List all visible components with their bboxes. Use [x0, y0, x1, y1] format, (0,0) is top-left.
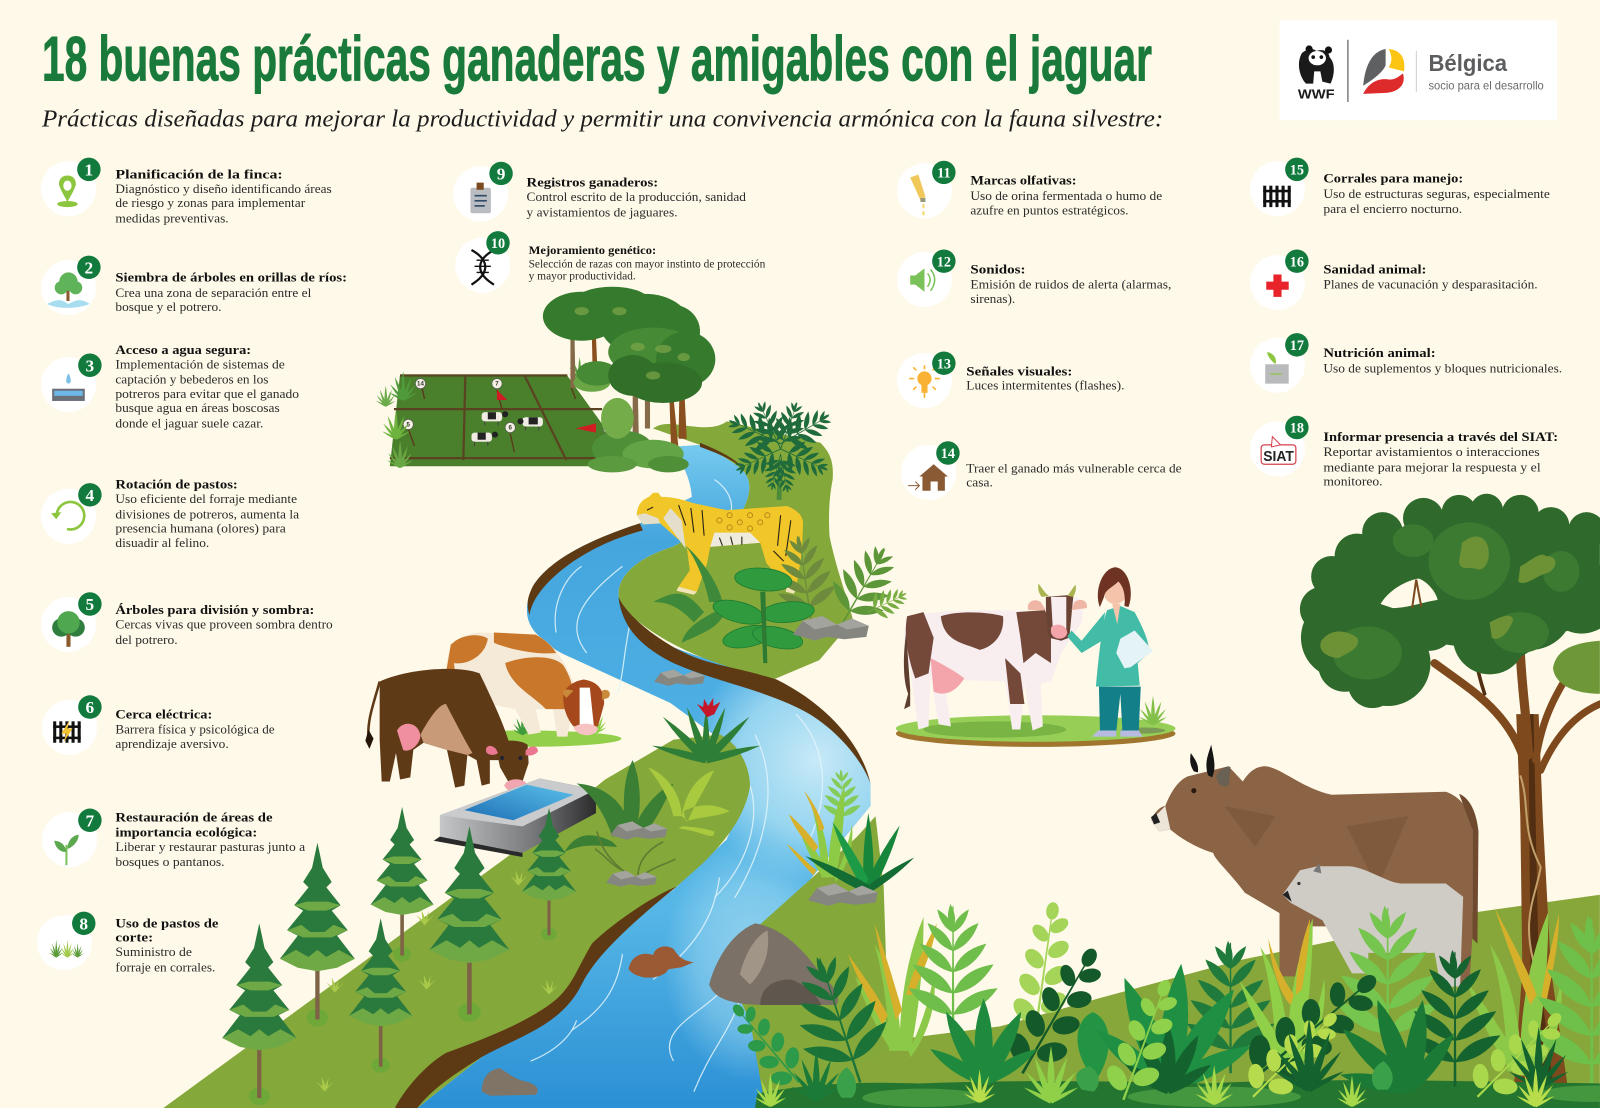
canopy highlights: [1320, 536, 1555, 658]
practice 9: Registros ganaderos:: [527, 176, 658, 190]
icon 8: grass: 8: [79, 914, 88, 933]
practice 3: busque agua en áreas boscosas: [115, 401, 280, 415]
bromeliad: [651, 698, 761, 764]
icon 6: electric fence: [42, 695, 102, 755]
big tree: [1300, 494, 1600, 1084]
practice 3: Implementación de sistemas de: [115, 357, 285, 371]
cow: [904, 584, 1087, 731]
zebu calf: [1283, 863, 1463, 987]
icon 13: light bulb: [897, 351, 956, 408]
dairy cow and vet: [896, 567, 1175, 747]
hill: lower right: [755, 895, 1600, 1108]
icon 2: tree by river: [41, 256, 101, 315]
orange and white cow: [430, 633, 621, 747]
icon 18: SIAT: [1250, 416, 1309, 476]
practice 13: Luces intermitentes (flashes).: [966, 379, 1124, 393]
practice 9: y avistamientos de jaguares.: [527, 205, 678, 219]
water trough: [434, 778, 596, 857]
practice 10: Selección de razas con mayor instinto de protección: [529, 258, 766, 270]
practice 2: bosque y el potrero.: [115, 300, 222, 314]
grass tuft: [1139, 696, 1167, 725]
practice 11: Marcas olfativas:: [970, 174, 1076, 188]
practice 7: [42, 809, 306, 869]
practice 1: medidas preventivas.: [115, 211, 229, 225]
river rock: [654, 669, 705, 686]
trunk: [1435, 653, 1600, 1084]
Bélgica text: Bélgica: [1428, 50, 1508, 76]
practice 18: mediante para mejorar la respuesta y el: [1323, 460, 1541, 474]
icon 15: corral fence: 15: [1290, 162, 1304, 178]
icon 1: location pin: 1: [85, 160, 93, 179]
practice 18: monitoreo.: [1323, 475, 1383, 489]
icon 14: house: [901, 441, 960, 500]
practice 7: Liberar y restaurar pasturas junto a: [115, 840, 306, 854]
forest canopy: [543, 287, 715, 403]
icon 3: water trough: 3: [86, 356, 95, 375]
icon 16: red cross: [1250, 249, 1309, 310]
river plant group: [787, 769, 916, 906]
practice 2: [41, 256, 347, 315]
practice 5: Árboles para división y sombra:: [115, 603, 314, 617]
icon 7: sprout: 7: [86, 811, 95, 830]
icon 13: light bulb: 13: [937, 356, 951, 372]
practice 1: Diagnóstico y diseño identificando áreas: [115, 182, 332, 196]
practice 4: Uso eficiente del forraje mediante: [115, 492, 297, 506]
practice 3: [41, 343, 299, 430]
practice 3: captación y bebederos en los: [115, 373, 269, 387]
practice 8: forraje en corrales.: [115, 960, 215, 974]
rocks: [610, 821, 667, 840]
practice 3: potreros para evitar que el ganado: [115, 387, 299, 401]
practice 14: [901, 441, 1182, 500]
practice 9: [453, 162, 747, 221]
icon 9: records clipboard: 9: [497, 165, 506, 184]
brown rock: [629, 946, 694, 978]
icon 8: grass: [37, 912, 96, 970]
practice 14: Traer el ganado más vulnerable cerca de: [966, 461, 1182, 475]
mid plants: [564, 698, 761, 887]
practice 7: Restauración de áreas de: [115, 810, 273, 824]
practice 15: Corrales para manejo:: [1323, 172, 1463, 186]
practice 16: [1250, 249, 1538, 310]
practice 3: Acceso a agua segura:: [115, 343, 251, 357]
practice 4: presencia humana (olores) para: [115, 522, 286, 536]
field flags: [497, 390, 596, 433]
rocks: [793, 616, 869, 641]
practice 6: Barrera física y psicológica de: [115, 723, 275, 737]
practice 1: de riesgo y zonas para implementar: [115, 196, 306, 210]
practice 4: divisiones de potreros, aumenta la: [115, 507, 299, 521]
practice 2: Siembra de árboles en orillas de ríos:: [115, 271, 347, 285]
practice 8: Uso de pastos de: [115, 916, 219, 930]
river bank upper left: [528, 523, 643, 615]
practice 10: y mayor productividad.: [529, 271, 636, 283]
practice 11: Uso de orina fermentada o humo de: [970, 189, 1163, 203]
icon 18: SIAT: 18: [1290, 421, 1304, 437]
river rocks: [482, 923, 838, 1096]
practice 4: Rotación de pastos:: [115, 478, 238, 492]
practice 8: [37, 912, 219, 974]
field cows: [471, 411, 543, 446]
practice 7: importancia ecológica:: [115, 826, 257, 840]
icon 5: shade tree: [41, 592, 102, 652]
practice 14: casa.: [966, 476, 993, 490]
practice 10: [455, 231, 766, 293]
icon 10: DNA: 10: [491, 236, 505, 252]
dark grass leaves: [653, 546, 725, 643]
practice 15: [1250, 158, 1550, 216]
practice 5: Cercas vivas que proveen sombra dentro: [115, 617, 333, 631]
practice 15: para el encierro nocturno.: [1323, 202, 1462, 216]
big boulder: [709, 923, 838, 1005]
thin plant: [595, 832, 676, 877]
practice 17: [1250, 333, 1562, 393]
branches: [1435, 653, 1600, 770]
practice 17: Uso de suplementos y bloques nutricionales.: [1323, 361, 1562, 375]
grass tufts: [316, 870, 558, 1092]
practice 6: Cerca eléctrica:: [115, 707, 212, 721]
dark row foliage: [774, 933, 1504, 1108]
logos panel: [1280, 20, 1557, 120]
icon 6: electric fence: 6: [86, 698, 95, 717]
icon 3: water trough: [41, 354, 102, 412]
grass platform: [896, 715, 1175, 747]
icon 5: shade tree: 5: [86, 595, 95, 614]
dark fronds: [564, 760, 673, 852]
icon 17: nutrition block: 17: [1290, 338, 1304, 354]
practice 4: [41, 478, 299, 550]
forest undergrowth: [574, 373, 689, 472]
practice 12: sirenas).: [970, 292, 1015, 306]
socio text: socio para el desarrollo: [1428, 78, 1544, 92]
icon 14: house: 14: [941, 446, 955, 462]
icon 18: SIAT: SIAT: [1263, 449, 1294, 465]
leafy rushes: [767, 531, 913, 640]
conifer trees: [222, 807, 576, 1105]
icon 11: scent bottle: [897, 161, 956, 218]
canopy gap: [1381, 578, 1438, 608]
back row foliage: [848, 898, 1600, 1104]
ground strip: [755, 1080, 1600, 1108]
plants near jaguar: [653, 531, 913, 663]
grass strip: [430, 731, 621, 747]
icon 10: DNA: [455, 231, 510, 293]
field signs: [403, 379, 613, 452]
icon 12: speaker: 12: [937, 254, 951, 270]
practice 11: [897, 161, 1163, 218]
fern tree: [720, 394, 840, 500]
practice 16: Sanidad animal:: [1323, 262, 1426, 276]
icon 12: speaker: [897, 249, 956, 307]
practice 11: azufre en puntos estratégicos.: [970, 203, 1129, 217]
practice 7: bosques o pantanos.: [115, 855, 225, 869]
practice 18: Informar presencia a través del SIAT:: [1323, 430, 1558, 444]
foreground vegetation: [716, 898, 1600, 1108]
practice 18: Reportar avistamientos o interacciones: [1323, 445, 1540, 459]
forest trunks: [570, 337, 687, 459]
river bank upper right: [618, 597, 870, 784]
river: [418, 444, 870, 1108]
practice 13: Señales visuales:: [966, 364, 1072, 378]
icon: Belgium B logo: [1363, 49, 1404, 94]
river ripples: [531, 480, 822, 1092]
pale fronds: [648, 767, 730, 836]
icon: WWF panda: WWF: [1298, 86, 1335, 101]
practice 6: [42, 695, 275, 755]
practice 12: [897, 249, 1171, 307]
side bush: [1553, 641, 1600, 694]
practice 16: Planes de vacunación y desparasitación.: [1323, 278, 1538, 292]
icon 2: tree by river: 2: [85, 258, 93, 277]
land: left slope: [163, 735, 750, 1108]
field signs: 6: [509, 425, 513, 432]
river bank top right: [700, 443, 744, 469]
practice 9: Control escrito de la producción, sanidad: [527, 190, 747, 204]
practice 12: Sonidos:: [970, 262, 1025, 276]
icon 15: corral fence: [1250, 158, 1309, 216]
zebu adult: [1151, 745, 1478, 987]
practice 13: [897, 351, 1124, 408]
field shrubs: [376, 357, 591, 468]
practice 5: del potrero.: [115, 633, 178, 647]
practice 8: corte:: [115, 931, 153, 945]
front row foliage: [716, 970, 1579, 1108]
practice 8: Suministro de: [115, 945, 192, 959]
practice 3: donde el jaguar suele cazar.: [115, 416, 263, 430]
practice 18: [1250, 416, 1558, 489]
ground highlights: [862, 1086, 1600, 1107]
big leaves: [711, 566, 815, 653]
canopy: [1300, 494, 1600, 708]
field signs: 5: [606, 426, 610, 433]
field: pasture plots: [376, 357, 633, 468]
practice 6: aprendizaje aversivo.: [115, 737, 229, 751]
grey rock: [482, 1068, 538, 1096]
practice 1: [41, 158, 332, 225]
field signs: 7: [495, 381, 499, 388]
icon 16: red cross: 16: [1290, 254, 1304, 270]
subtitle: Prácticas diseñadas para mejorar la productividad y permitir una convivencia armónica con la fauna silvestre:: [41, 106, 1163, 133]
practice 17: Nutrición animal:: [1323, 346, 1436, 360]
jaguar: [637, 493, 803, 595]
icon 1: location pin: [41, 158, 101, 216]
field signs: 14: [417, 381, 424, 388]
practice 5: [41, 592, 333, 652]
forest: [543, 287, 715, 472]
icon 9: records clipboard: [453, 162, 513, 221]
practice 1: Planificación de la finca:: [115, 168, 283, 182]
icon 11: scent bottle: 11: [937, 166, 951, 182]
practice 4: disuadir al felino.: [115, 536, 209, 550]
practice 2: Crea una zona de separación entre el: [115, 286, 312, 300]
icon 7: sprout: [42, 809, 102, 867]
practice 15: Uso de estructuras seguras, especialmente: [1323, 187, 1550, 201]
icon: WWF panda: [1298, 45, 1335, 101]
icon 17: nutrition block: [1250, 333, 1309, 393]
vet: [1067, 567, 1153, 737]
river bank lower: [395, 887, 677, 1108]
icon 4: rotation arrow: 4: [86, 486, 95, 505]
land: river right patch: [720, 816, 890, 1108]
icon 4: rotation arrow: [41, 483, 102, 544]
practice 10: Mejoramiento genético:: [529, 243, 656, 257]
field signs: 5: [407, 421, 411, 428]
practice 12: Emisión de ruidos de alerta (alarmas,: [970, 278, 1171, 292]
land: jaguar island: [528, 421, 870, 784]
brown cow: [365, 669, 538, 792]
